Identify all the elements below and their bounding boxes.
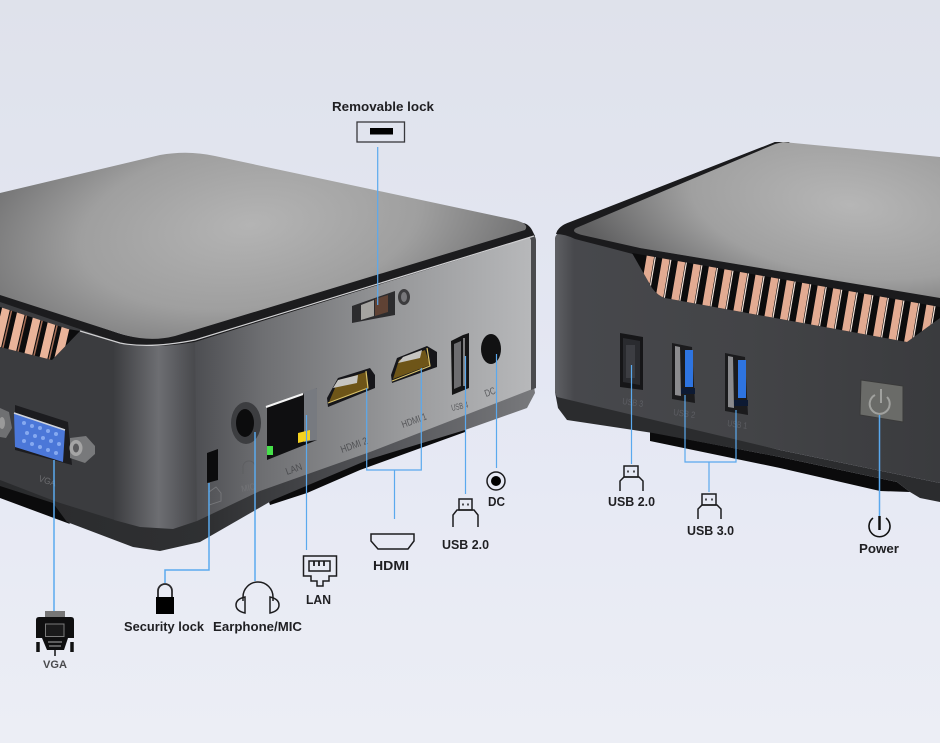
- heading: removable lock: Removable lock: [332, 99, 435, 114]
- USB silk labels: USB 3: [622, 396, 644, 409]
- icon: DC jack: [487, 472, 505, 490]
- LAN silk label: LAN: [284, 462, 304, 478]
- USB 3.0 port B: [725, 353, 748, 415]
- label: VGA: [36, 611, 74, 671]
- top face: [574, 142, 940, 298]
- MIC silk label: [243, 461, 255, 474]
- label: HDMI: [371, 534, 414, 573]
- label: removable lock: [332, 99, 435, 142]
- label: security lock: [124, 584, 205, 634]
- top rim: [0, 223, 535, 346]
- icon: removable lock: [357, 122, 404, 142]
- icon: padlock: [156, 584, 174, 614]
- label: earphone and mic: [213, 582, 303, 634]
- top face: [0, 153, 526, 339]
- USB silk labels: USB 2: [673, 407, 696, 420]
- USB port: [451, 333, 469, 395]
- DC silk label: DC: [483, 386, 497, 400]
- removable lock switch: [352, 289, 410, 323]
- label: USB 2.0 front: USB 2.0: [608, 494, 655, 509]
- USB silk labels: [622, 396, 748, 431]
- underside: [650, 432, 910, 492]
- icon: USB plug: [620, 466, 643, 491]
- icon: USB plug: [453, 499, 478, 527]
- USB 2.0 port right: [620, 333, 643, 390]
- bottom band: [555, 392, 940, 502]
- audio jack: [231, 402, 261, 444]
- corner column: [114, 338, 197, 529]
- label: power: Power: [859, 541, 899, 556]
- rim highlight: [80, 236, 534, 345]
- bottom band: [0, 380, 535, 551]
- security slot: [207, 449, 218, 483]
- lock silk icon: [209, 487, 221, 505]
- label: USB 2.0 front: [608, 466, 655, 509]
- top rim: [556, 142, 940, 308]
- label: USB 3.0: USB 3.0: [687, 523, 734, 538]
- label: USB 3.0: [687, 494, 734, 538]
- label: DC: [487, 472, 506, 509]
- USB 3.0 port A: [672, 343, 695, 403]
- right edge trim: [527, 232, 536, 390]
- right face: [195, 236, 535, 521]
- power button: [860, 380, 903, 422]
- vent: left: [0, 307, 80, 360]
- label: LAN: LAN: [306, 592, 331, 607]
- icon: power: [869, 516, 890, 537]
- icon: VGA connector: [36, 611, 74, 656]
- infographic canvas: [0, 102, 940, 668]
- label: security lock: Security lock: [124, 619, 205, 634]
- USB silk label: USB 4: [450, 400, 469, 413]
- label: power: [859, 516, 899, 556]
- VGA port: [0, 405, 95, 465]
- label: USB 2.0 rear: [442, 499, 489, 552]
- panel: left mini PC: [0, 153, 536, 551]
- VGA silk label: VGA: [37, 473, 58, 488]
- connector lines: [54, 147, 880, 611]
- icon: USB plug: [698, 494, 721, 519]
- label: HDMI: HDMI: [373, 558, 409, 573]
- panel: right mini PC: [555, 142, 940, 502]
- DC jack: [481, 334, 501, 364]
- HDMI silk labels: [339, 411, 429, 456]
- label: VGA: VGA: [43, 659, 67, 671]
- icon: headphones: [236, 582, 279, 613]
- HDMI silk labels: HDMI 1: [400, 411, 429, 431]
- label: DC: DC: [488, 494, 506, 509]
- icon: LAN jack: [304, 556, 336, 586]
- underside left: [0, 484, 70, 524]
- LAN port: [266, 388, 317, 460]
- HDMI ports: [327, 346, 437, 407]
- underside right: [265, 424, 465, 505]
- body face: [555, 142, 940, 483]
- side face left: [0, 297, 118, 521]
- label: LAN: [304, 556, 336, 607]
- vent: right: [632, 253, 940, 342]
- label: earphone and mic: Earphone/MIC: [213, 619, 303, 634]
- HDMI silk labels: HDMI 2: [339, 436, 370, 456]
- USB silk labels: USB 1: [727, 418, 748, 431]
- icon: HDMI plug: [371, 534, 414, 549]
- MIC silk text: MIC: [240, 481, 257, 494]
- label: USB 2.0 rear: USB 2.0: [442, 537, 489, 552]
